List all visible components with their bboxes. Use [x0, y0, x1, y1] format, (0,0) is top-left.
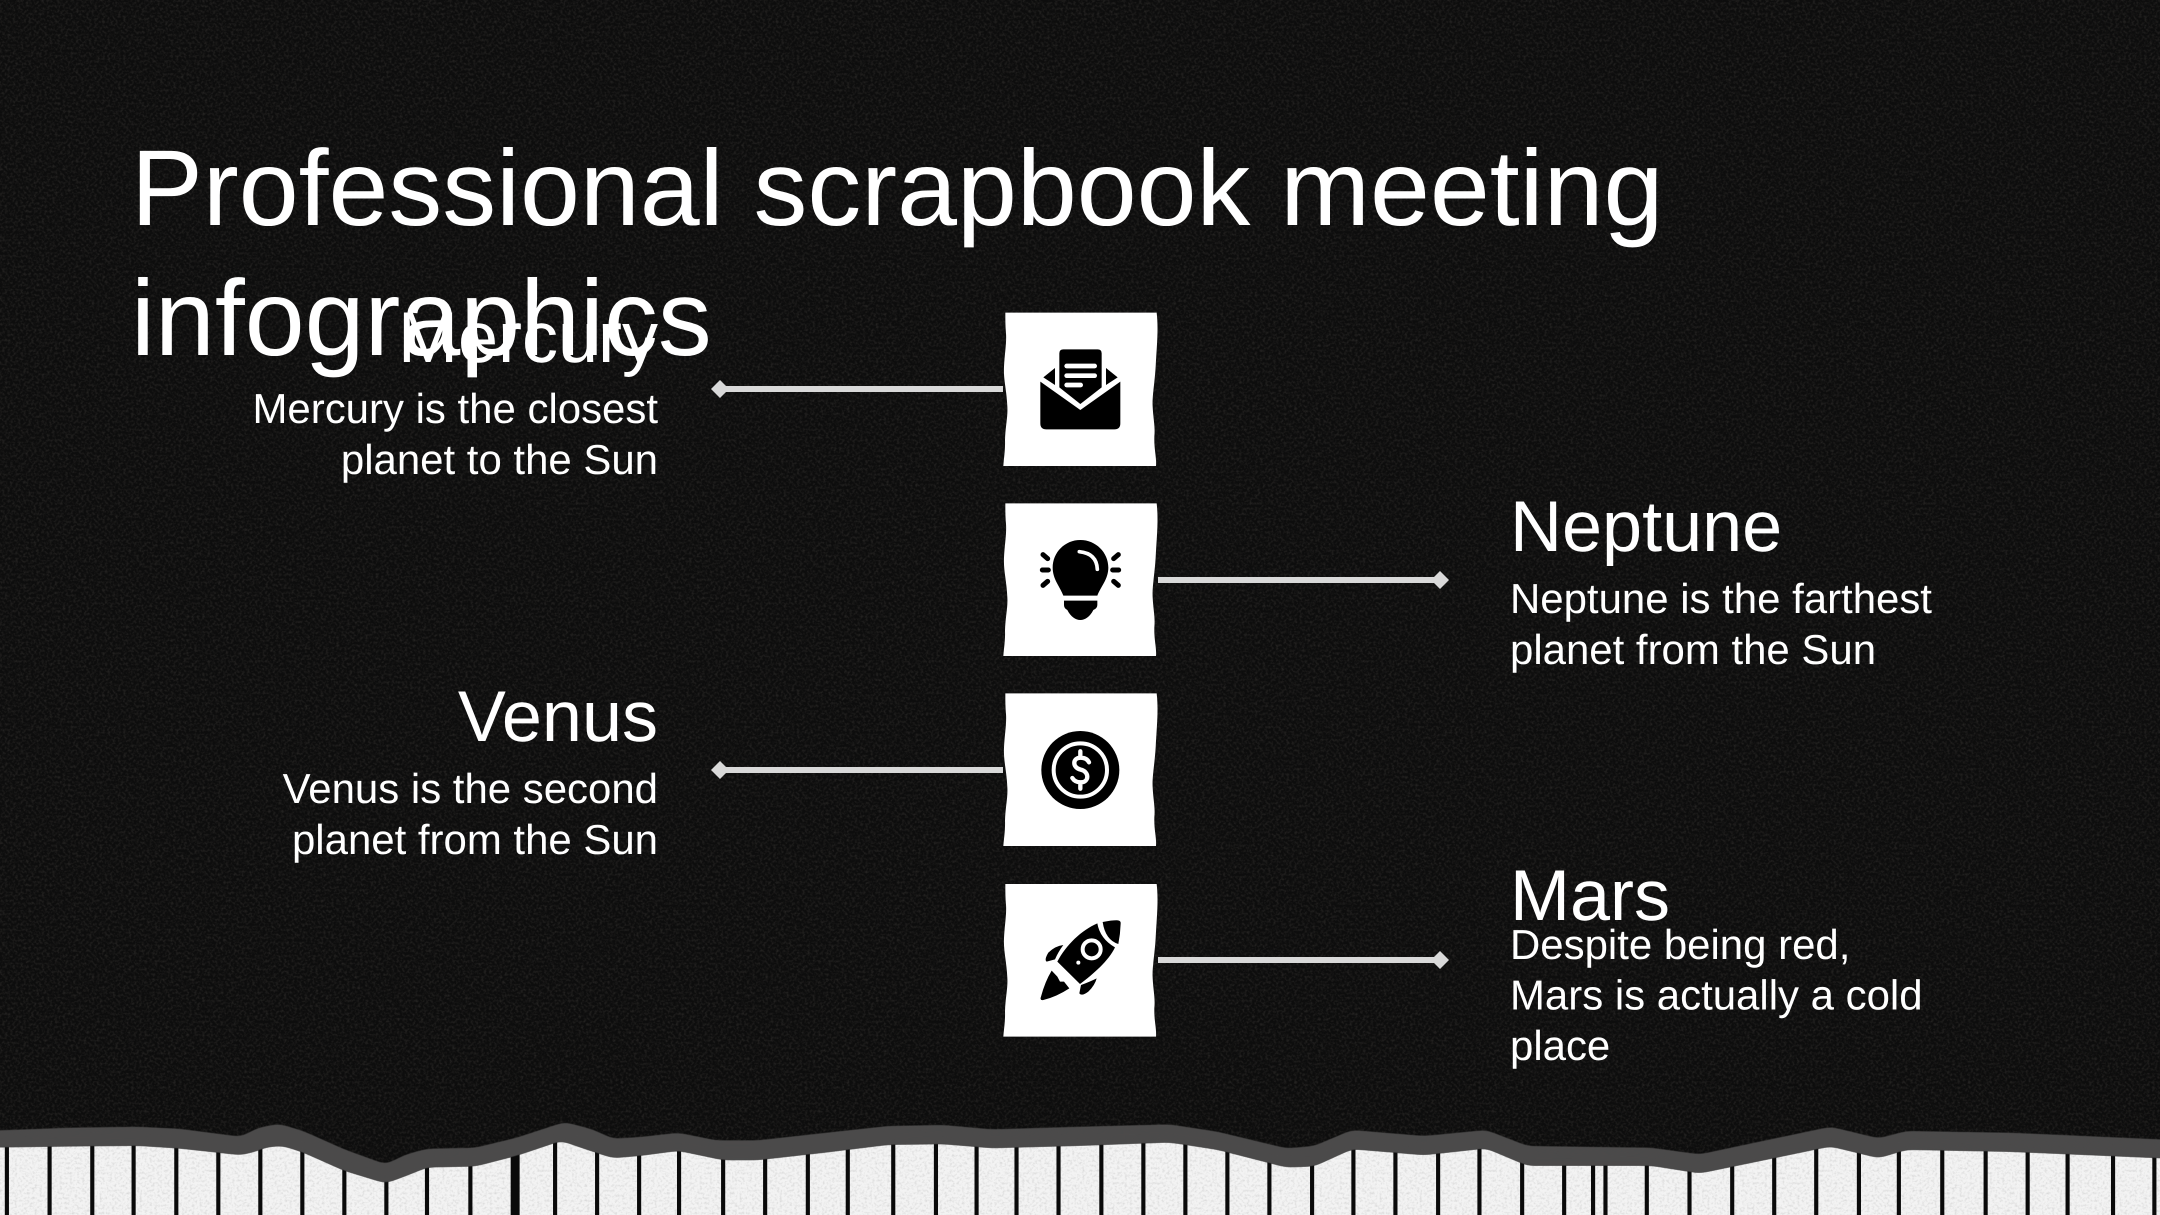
text block: Venus: planet from the Sun	[292, 816, 658, 863]
torn paper band: grey edge	[0, 1123, 2160, 1183]
text block: Neptune: planet from the Sun	[1510, 626, 1876, 673]
title: Professional scrapbook meeting	[131, 128, 1663, 248]
text block: Venus	[283, 677, 658, 863]
text block: Venus: Venus is the second	[283, 765, 658, 812]
text block: Neptune: Neptune is the farthest	[1510, 575, 1932, 622]
text block: Venus: Venus	[458, 677, 658, 757]
text block: Mars: Mars	[1510, 856, 1670, 936]
text block: Mercury	[252, 298, 658, 483]
text block: Neptune: Neptune	[1510, 487, 1782, 567]
panel: light bulb tile	[1003, 503, 1158, 656]
connector: Venus	[711, 761, 1003, 779]
icon: open envelope with letter	[1040, 349, 1120, 429]
title: infographics	[131, 258, 712, 378]
text block: Mars: place	[1510, 1022, 1610, 1069]
torn paper strip: lined notebook edge	[0, 1080, 2160, 1215]
text block: Neptune	[1510, 487, 1932, 673]
panel: rocket tile	[1003, 884, 1158, 1037]
text block: Mars	[1510, 856, 1923, 1069]
connector: Mercury	[711, 380, 1003, 398]
connector: Neptune	[1158, 571, 1449, 589]
text block: Mercury: planet to the Sun	[341, 436, 658, 483]
icon: light bulb	[1042, 540, 1119, 620]
text block: Mars: Despite being red,	[1510, 921, 1850, 968]
text block: Mars: Mars is actually a cold	[1510, 972, 1923, 1018]
panel: coin tile	[1003, 693, 1158, 846]
icon: rocket	[1041, 920, 1121, 1000]
icon: dollar coin	[1041, 731, 1119, 809]
text block: Mercury: Mercury is the closest	[252, 385, 658, 432]
connector: Mars	[1158, 951, 1449, 969]
panel: envelope tile	[1003, 313, 1158, 466]
text block: Mercury: Mercury	[398, 298, 658, 378]
